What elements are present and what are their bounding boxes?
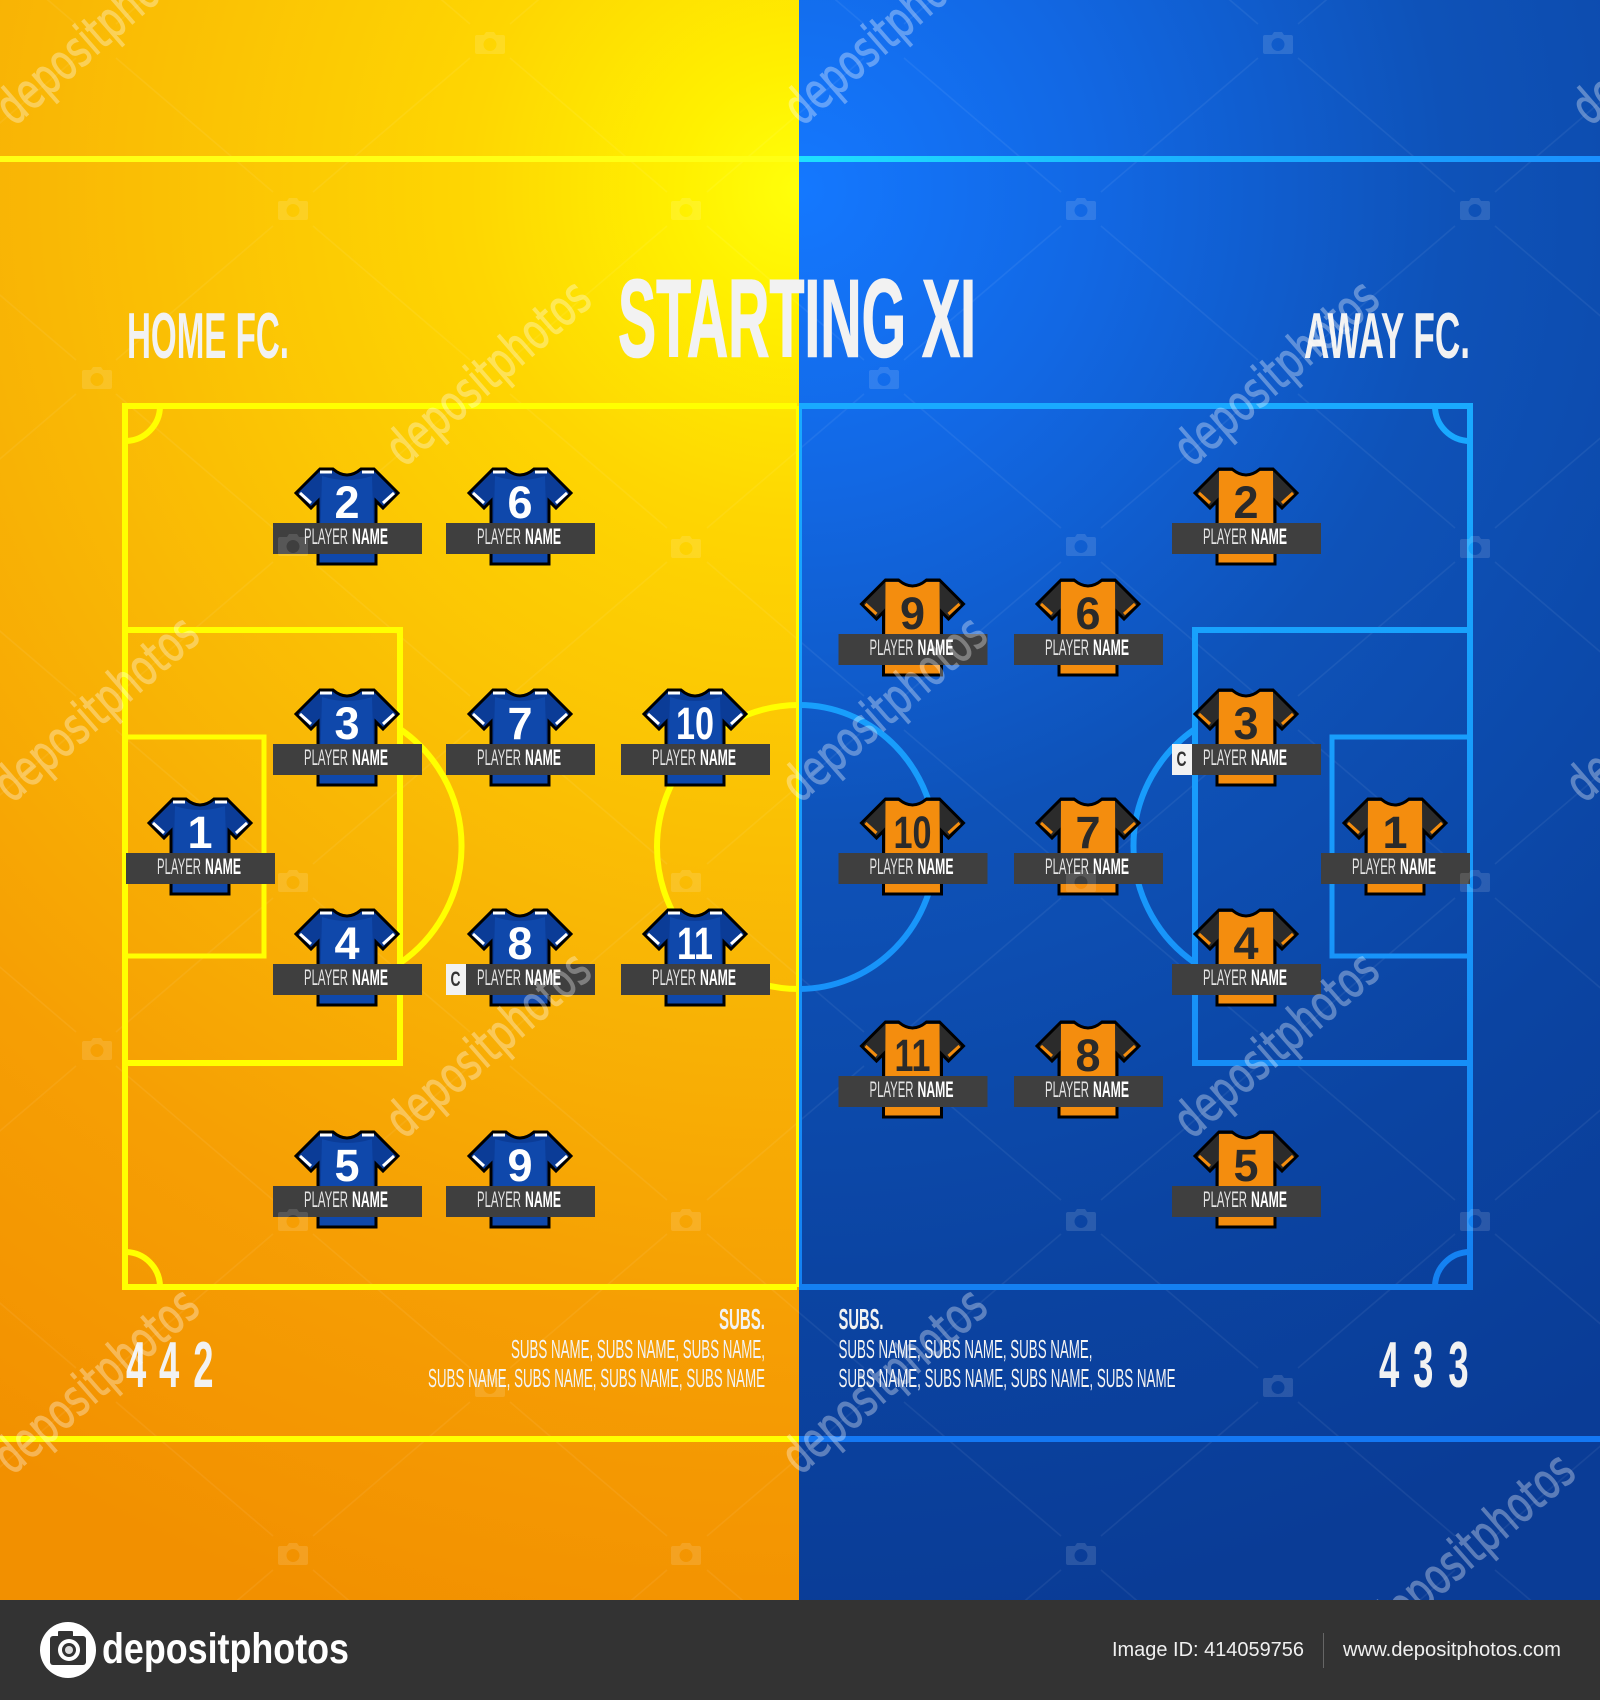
player: away 6: NAME bbox=[1093, 635, 1129, 660]
player: away 5: NAME bbox=[1251, 1187, 1287, 1212]
player: home 2: PLAYER bbox=[304, 524, 348, 549]
pitch markings: home half bbox=[125, 406, 799, 1287]
player: home 9: 9 bbox=[507, 1140, 533, 1191]
player: away 3 captain: 3 bbox=[1233, 698, 1259, 749]
player: away 10: 10 bbox=[894, 807, 932, 858]
panel: away side background bbox=[799, 0, 1600, 1600]
player: away 5: 5 bbox=[1233, 1140, 1259, 1191]
player: home 2: NAME bbox=[352, 524, 388, 549]
away formation 4 3 3: 433 bbox=[1379, 1329, 1469, 1402]
away substitutes: SUBS NAME, SUBS NAME, SUBS NAME, bbox=[838, 1334, 1092, 1364]
player: home 10 bbox=[621, 690, 770, 785]
player: away 9 bbox=[838, 580, 988, 675]
player: away 4: 4 bbox=[1233, 918, 1259, 969]
player: home 3: 3 bbox=[334, 698, 360, 749]
top touchline away bbox=[799, 156, 1600, 162]
player: home 8 captain: C bbox=[450, 968, 460, 991]
player: home 7: PLAYER bbox=[477, 745, 521, 770]
player: away 2: 2 bbox=[1233, 477, 1259, 528]
player: home 5 bbox=[273, 1132, 422, 1227]
player: away 1: 1 bbox=[1382, 807, 1408, 858]
player: away 2: NAME bbox=[1251, 524, 1287, 549]
watermark text: depositphotos bbox=[770, 1276, 998, 1485]
home formation 4 4 2: 442 bbox=[126, 1329, 213, 1402]
player: away 8 bbox=[1014, 1022, 1163, 1117]
player: home 2 bbox=[273, 469, 422, 564]
player: away 8: 8 bbox=[1075, 1030, 1101, 1081]
home substitutes: SUBS. bbox=[719, 1304, 765, 1336]
player: home 9: PLAYER bbox=[477, 1187, 521, 1212]
away substitutes: SUBS. bbox=[838, 1304, 884, 1336]
player: home 5: NAME bbox=[352, 1187, 388, 1212]
player: away 11: NAME bbox=[918, 1077, 954, 1102]
player: home 11: NAME bbox=[700, 965, 736, 990]
player: away 11: 11 bbox=[894, 1030, 930, 1081]
footer website: www.depositphotos.com bbox=[1342, 1639, 1561, 1661]
player: away 7: NAME bbox=[1093, 854, 1129, 879]
player: home 5: PLAYER bbox=[304, 1187, 348, 1212]
player: away 9: 9 bbox=[900, 588, 925, 639]
away players bbox=[838, 469, 1470, 1227]
player: home 4 bbox=[273, 910, 422, 1005]
player: home 2: 2 bbox=[334, 477, 360, 528]
top touchline home bbox=[0, 156, 799, 162]
player: home 4: NAME bbox=[352, 965, 388, 990]
player: away 11: PLAYER bbox=[870, 1077, 914, 1102]
player: away 3 captain: C bbox=[1176, 748, 1186, 771]
player: away 3 captain bbox=[1172, 690, 1321, 785]
player: home 3 bbox=[273, 690, 422, 785]
player: home 1: PLAYER bbox=[157, 854, 201, 879]
player: home 6: NAME bbox=[525, 524, 561, 549]
player: home 8 captain: PLAYER bbox=[477, 965, 521, 990]
player: away 6 bbox=[1014, 580, 1163, 675]
bottom touchline home bbox=[0, 1436, 799, 1442]
player: home 7: 7 bbox=[507, 698, 533, 749]
player: away 1 bbox=[1321, 799, 1470, 894]
heading: home team: HOME FC. bbox=[127, 299, 289, 372]
player: away 10 bbox=[838, 799, 988, 894]
player: home 6: 6 bbox=[507, 477, 533, 528]
watermark text: depositphotos bbox=[374, 268, 602, 477]
player: away 6: 6 bbox=[1075, 588, 1101, 639]
footer bar bbox=[0, 1600, 1600, 1700]
panel: home side background bbox=[0, 0, 799, 1600]
player: home 11: 11 bbox=[677, 918, 713, 969]
player: home 10: 10 bbox=[676, 698, 714, 749]
player: home 7 bbox=[446, 690, 595, 785]
title: STARTING XI bbox=[618, 258, 976, 380]
player: home 11: PLAYER bbox=[652, 965, 696, 990]
player: away 7 bbox=[1014, 799, 1163, 894]
player: away 3 captain: PLAYER bbox=[1203, 745, 1247, 770]
player: home 6: PLAYER bbox=[477, 524, 521, 549]
away substitutes: SUBS NAME, SUBS NAME, SUBS NAME, SUBS NAME bbox=[838, 1363, 1176, 1393]
player: home 4: PLAYER bbox=[304, 965, 348, 990]
player: home 10: PLAYER bbox=[652, 745, 696, 770]
away substitutes bbox=[838, 1304, 1176, 1393]
player: home 1 bbox=[126, 799, 275, 894]
player: away 5 bbox=[1172, 1132, 1321, 1227]
player: home 8 captain: 8 bbox=[507, 918, 533, 969]
player: home 7: NAME bbox=[525, 745, 561, 770]
footer logo icon: camera bbox=[40, 1622, 96, 1678]
player: away 2 bbox=[1172, 469, 1321, 564]
pitch markings: away half bbox=[799, 406, 1470, 1287]
player: away 9: NAME bbox=[918, 635, 954, 660]
player: away 7: 7 bbox=[1075, 807, 1101, 858]
player: home 6 bbox=[446, 469, 595, 564]
player: away 7: PLAYER bbox=[1045, 854, 1089, 879]
home substitutes: SUBS NAME, SUBS NAME, SUBS NAME, bbox=[511, 1334, 765, 1364]
player: away 10: NAME bbox=[918, 854, 954, 879]
player: away 8: NAME bbox=[1093, 1077, 1129, 1102]
player: home 3: NAME bbox=[352, 745, 388, 770]
player: home 11 bbox=[621, 910, 770, 1005]
player: home 9 bbox=[446, 1132, 595, 1227]
player: home 8 captain: NAME bbox=[525, 965, 561, 990]
watermark text: depositphotos bbox=[1162, 268, 1390, 477]
watermark text: depositphotos bbox=[1162, 940, 1390, 1149]
player: home 4: 4 bbox=[334, 918, 360, 969]
watermark cameras bbox=[82, 32, 1490, 1565]
player: away 1: PLAYER bbox=[1352, 854, 1396, 879]
player: away 11 bbox=[838, 1022, 988, 1117]
home substitutes: SUBS NAME, SUBS NAME, SUBS NAME, SUBS NAME bbox=[428, 1363, 765, 1393]
player: home 10: NAME bbox=[700, 745, 736, 770]
player: home 3: PLAYER bbox=[304, 745, 348, 770]
player: away 2: PLAYER bbox=[1203, 524, 1247, 549]
player: home 1: 1 bbox=[187, 807, 213, 858]
player: away 4: PLAYER bbox=[1203, 965, 1247, 990]
player: away 5: PLAYER bbox=[1203, 1187, 1247, 1212]
player: home 8 captain bbox=[446, 910, 595, 1005]
bottom touchline away bbox=[799, 1436, 1600, 1442]
footer image id: Image ID: 414059756 bbox=[1112, 1639, 1304, 1661]
home substitutes bbox=[428, 1304, 765, 1393]
player: away 10: PLAYER bbox=[870, 854, 914, 879]
watermark text: depositphotos bbox=[374, 940, 602, 1149]
player: away 3 captain: NAME bbox=[1251, 745, 1287, 770]
player: away 1: NAME bbox=[1400, 854, 1436, 879]
player: away 8: PLAYER bbox=[1045, 1077, 1089, 1102]
player: home 1: NAME bbox=[205, 854, 241, 879]
player: away 4 bbox=[1172, 910, 1321, 1005]
player: away 9: PLAYER bbox=[870, 635, 914, 660]
player: away 6: PLAYER bbox=[1045, 635, 1089, 660]
player: away 4: NAME bbox=[1251, 965, 1287, 990]
player: home 5: 5 bbox=[334, 1140, 360, 1191]
player: home 9: NAME bbox=[525, 1187, 561, 1212]
watermark text: depositphotos bbox=[770, 604, 998, 813]
home players bbox=[126, 469, 770, 1227]
footer logo wordmark: depositphotos bbox=[102, 1625, 349, 1673]
